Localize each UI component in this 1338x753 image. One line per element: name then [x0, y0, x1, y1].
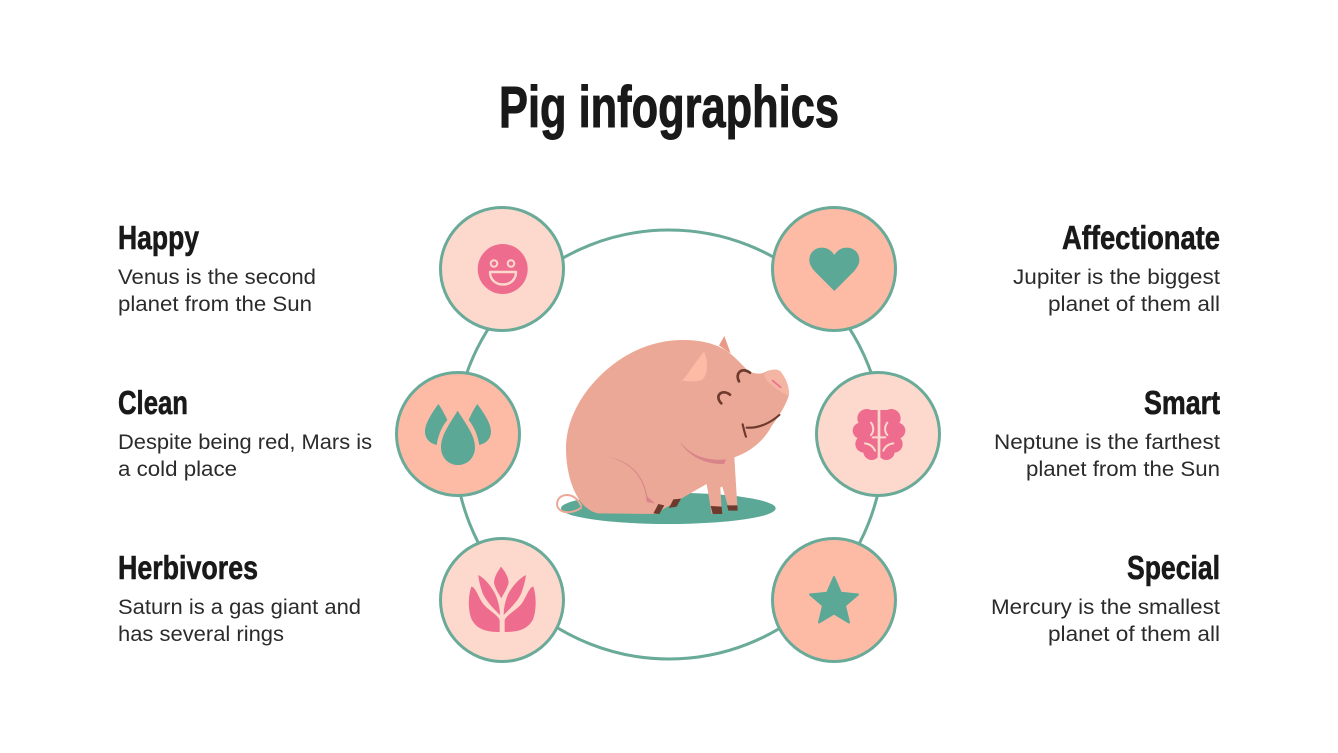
text: Clean description: a cold place: [118, 457, 237, 481]
icon: star: [810, 577, 858, 622]
text: Affectionate description: Jupiter is the biggest: [1013, 265, 1220, 289]
back hooves: [653, 499, 681, 514]
far ear: [719, 336, 731, 353]
text: Herbivores description: [118, 595, 361, 646]
pig illustration: [557, 336, 789, 524]
text: Special description: Mercury is the smallest: [991, 595, 1220, 619]
title: Pig infographics: [499, 75, 839, 140]
circle: Special: [772, 538, 896, 662]
heading: Special: Special: [1127, 549, 1220, 586]
mouth: [743, 415, 779, 437]
heading: Herbivores: Herbivores: [118, 549, 258, 586]
front hooves: [711, 505, 738, 514]
text: Smart description: planet from the Sun: [1026, 457, 1220, 481]
text: Affectionate description: [1013, 265, 1220, 316]
text: Happy description: [118, 265, 316, 316]
item: Special: [772, 538, 1220, 662]
heading: Affectionate: Affectionate: [1062, 219, 1220, 256]
tail: [557, 495, 582, 512]
item: Affectionate: [772, 208, 1220, 330]
icon: smiling face: [478, 244, 528, 294]
text: Herbivores description: has several rings: [118, 622, 284, 646]
item: Smart: [816, 372, 1220, 496]
body creases: [607, 441, 726, 503]
text: Special description: [991, 595, 1220, 646]
eyes: [718, 370, 750, 403]
text: Special description: planet of them all: [1048, 622, 1220, 646]
item: Herbivores: [118, 538, 564, 662]
heading: Smart: Smart: [1144, 384, 1220, 421]
snout: [764, 370, 789, 396]
icon: water drops: [425, 404, 491, 465]
pig body: [566, 340, 789, 514]
circle: Clean: [396, 372, 520, 496]
circle: Happy: [440, 208, 564, 330]
text: Happy description: Venus is the second: [118, 265, 316, 289]
text: Affectionate description: planet of them all: [1048, 292, 1220, 316]
text: Smart description: Neptune is the farthest: [994, 430, 1220, 454]
circle: Smart: [816, 372, 940, 496]
circle: Affectionate: [772, 208, 896, 330]
icon: lotus plant: [469, 567, 536, 632]
connecting ring: [454, 230, 884, 659]
item: Clean: [118, 372, 520, 496]
text: Clean description: Despite being red, Mars is: [118, 430, 372, 454]
heading: Happy: Happy: [118, 219, 200, 256]
heading: Clean: Clean: [118, 384, 188, 421]
icon: heart: [809, 248, 859, 291]
text: Herbivores description: Saturn is a gas giant and: [118, 595, 361, 619]
text: Smart description: [994, 430, 1220, 481]
near ear: [682, 352, 707, 381]
item: Happy: [118, 208, 564, 330]
text: Happy description: planet from the Sun: [118, 292, 312, 316]
text: Clean description: [118, 430, 372, 481]
icon: brain: [853, 407, 905, 462]
ground shadow: [561, 493, 776, 524]
circle: Herbivores: [440, 538, 564, 662]
nostril: [773, 381, 781, 387]
